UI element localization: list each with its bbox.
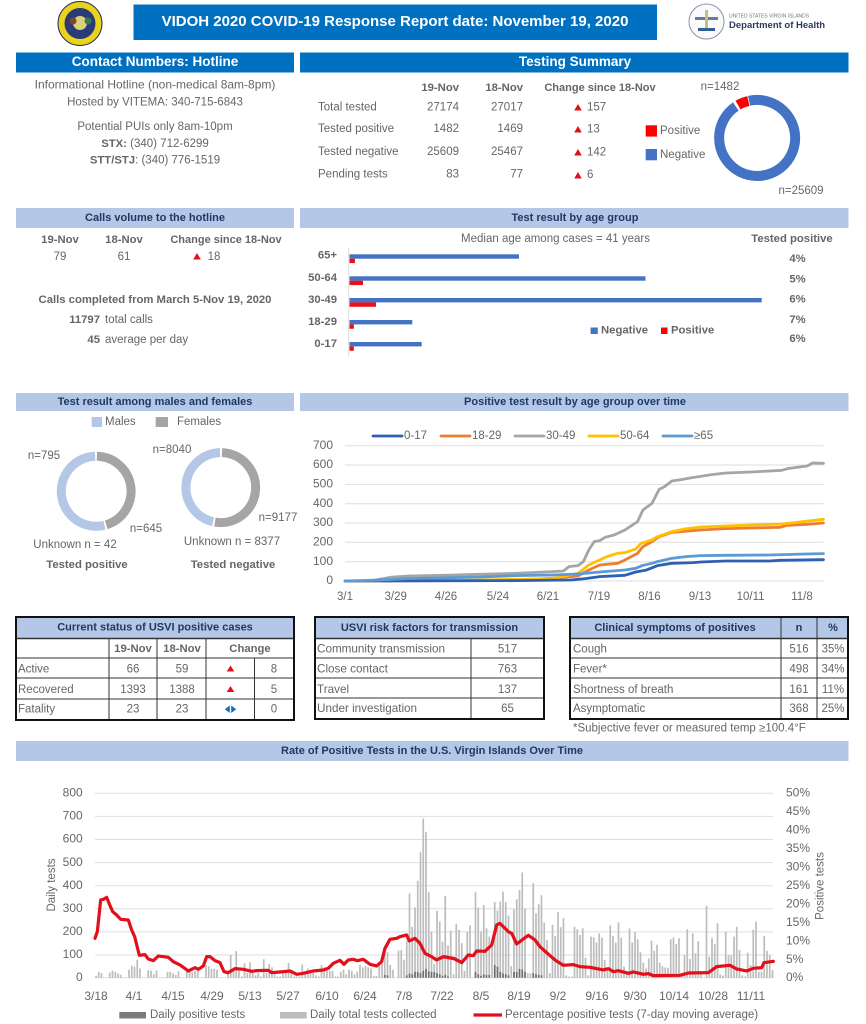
bar chart: tests by age group: 50-64: [308, 272, 338, 284]
text block: calls completed: Calls completed from March 5-Nov 19, 2020: [39, 294, 271, 306]
table: testing counts: 25609: [427, 146, 459, 158]
column: tested positive percentages: 6%: [789, 333, 806, 345]
heading: positive by age over time: [300, 393, 848, 411]
combo chart: daily tests and percent positive: 6/10: [315, 989, 339, 1003]
text block: hotline details: Informational Hotline (non-medical 8am-8pm): [35, 78, 275, 92]
column: tested positive percentages: 5%: [789, 273, 806, 285]
combo chart: daily tests and percent positive: 400: [63, 878, 83, 892]
donut chart: total positive vs negative: n=25609: [778, 185, 824, 197]
table: risk factors for transmission: 137: [498, 684, 517, 696]
line chart: cumulative positive by age: 3/1: [337, 591, 353, 603]
bar chart: tests by age group: 65+: [318, 249, 337, 261]
icon: Department of Health logo: UNITED STATES VIRGIN ISLANDS: [729, 13, 810, 19]
combo chart: daily tests and percent positive: 4/1: [126, 989, 143, 1003]
line chart: cumulative positive by age: 6/21: [537, 591, 559, 603]
table: clinical symptoms: Asymptomatic: [573, 703, 645, 715]
line chart: cumulative positive by age: 3/29: [385, 591, 407, 603]
table: current status of positive cases: 0: [271, 704, 277, 716]
legend: positive and negative: Negative: [660, 149, 705, 161]
combo chart: daily tests and percent positive: 10/28: [698, 989, 728, 1003]
table: clinical symptoms: 368: [789, 703, 809, 715]
heading: contact numbers: [16, 52, 294, 72]
table: clinical symptoms: 516: [789, 644, 809, 656]
legend: positive and negative: Positive: [660, 125, 700, 137]
table: clinical symptoms: n: [796, 622, 803, 634]
legend: age groups: 30-49: [546, 430, 575, 442]
icon: Department of Health logo: Department of Health: [729, 20, 825, 31]
combo chart: daily tests and percent positive: 10/14: [659, 989, 689, 1003]
legend: age groups: ≥65: [694, 430, 713, 442]
combo chart: daily tests and percent positive: Positive tests: [815, 852, 827, 920]
table: testing counts: 18-Nov: [485, 82, 524, 94]
donut chart: tested positive by sex: Unknown n = 42: [33, 539, 117, 551]
table: current status of positive cases: 18-Nov: [163, 643, 202, 655]
table: testing counts: 19-Nov: [421, 82, 460, 94]
table: risk factors for transmission: Under investigation: [317, 702, 417, 715]
table: risk factors for transmission: 517: [498, 644, 517, 656]
table: daily calls: 79: [54, 251, 66, 263]
combo chart: daily tests and percent positive: 4/15: [161, 989, 185, 1003]
combo chart: daily tests and percent positive: [46, 785, 827, 1003]
table: testing counts: [318, 82, 657, 181]
table: daily calls: Change since 18-Nov: [170, 234, 283, 246]
combo chart: daily tests and percent positive: 11/11: [737, 989, 765, 1003]
combo chart: daily tests and percent positive: 0%: [786, 970, 804, 984]
donut chart: tested negative by sex: Tested negative: [191, 559, 275, 571]
table: clinical symptoms: Fever*: [573, 664, 607, 676]
panel: test result by age group: [300, 208, 848, 357]
table: current status of positive cases: Active: [18, 664, 49, 676]
panel: calls volume: [16, 208, 294, 346]
combo chart: daily tests and percent positive: 40%: [786, 823, 810, 837]
legend: daily tests and moving average: Daily total tests collected: [310, 1009, 437, 1021]
panel: contact numbers hotline: [16, 52, 294, 167]
table: current status of positive cases: Fatality: [18, 704, 55, 716]
donut chart: tested negative by sex: n=8040: [153, 444, 191, 456]
table: testing counts: 142: [587, 147, 606, 159]
table: current status of positive cases: 1393: [120, 684, 146, 696]
text block: hotline details: STX: (340) 712-6299: [101, 138, 209, 150]
combo chart: daily tests and percent positive: 50%: [786, 785, 810, 799]
table: testing counts: Change since 18-Nov: [544, 82, 657, 94]
combo chart: daily tests and percent positive: 9/2: [550, 989, 567, 1003]
table: risk factors for transmission: Community transmission: [317, 643, 445, 656]
donut chart: tested negative by sex: [153, 444, 297, 571]
table: clinical symptoms: 34%: [821, 664, 845, 676]
text block: hotline details: STT/STJ: (340) 776-1519: [90, 154, 220, 167]
heading: rate of positive tests: [16, 741, 848, 761]
legend: age groups: 0-17: [404, 430, 427, 442]
icon: VIDOH seal: [58, 2, 102, 46]
line chart: cumulative positive by age: 100: [313, 554, 333, 568]
panel: positive by age over time: [300, 393, 848, 603]
table: testing counts: Total tested: [318, 102, 377, 114]
table: current status of positive cases: 19-Nov: [114, 643, 153, 655]
column: tested positive percentages: [751, 233, 833, 345]
table: risk factors for transmission: USVI risk factors for transmission: [341, 622, 518, 634]
combo chart: daily tests and percent positive: 9/16: [585, 989, 609, 1003]
heading: test result by age group: Test result by age group: [512, 212, 639, 224]
line chart: cumulative positive by age: 8/16: [638, 591, 661, 603]
heading: testing summary: [300, 52, 848, 72]
donut chart: tested positive by sex: n=645: [130, 523, 162, 535]
table: testing counts: 1469: [497, 123, 523, 135]
combo chart: daily tests and percent positive: Daily tests: [46, 858, 58, 912]
legend: age groups: 50-64: [620, 430, 650, 442]
donut chart: tested positive by sex: Tested positive: [46, 559, 128, 571]
title banner: [134, 4, 657, 40]
table: risk factors for transmission: [315, 617, 544, 719]
combo chart: daily tests and percent positive: 5/13: [238, 989, 262, 1003]
table: clinical symptoms: 498: [789, 664, 809, 676]
table: testing counts: 25467: [491, 146, 523, 158]
legend: males and females: Females: [177, 416, 221, 428]
heading: calls volume: Calls volume to the hotline: [85, 212, 225, 224]
legend: negative and positive: [591, 324, 714, 336]
text block: calls completed: 45: [87, 334, 100, 346]
table: testing counts: 13: [587, 124, 600, 136]
combo chart: daily tests and percent positive: 5%: [786, 952, 804, 966]
combo chart: daily tests and percent positive: 8/19: [507, 989, 531, 1003]
table: testing counts: 27174: [427, 102, 460, 114]
bar chart: tests by age group: 18-29: [308, 316, 337, 328]
text block: hotline details: Hosted by VITEMA: 340-715-6843: [67, 97, 243, 109]
combo chart: daily tests and percent positive: 3/18: [84, 989, 108, 1003]
table: current status of positive cases: Recovered: [18, 684, 74, 696]
text block: calls completed: 11797: [69, 314, 100, 326]
donut chart: tested negative by sex: n=9177: [259, 512, 297, 524]
table: current status of positive cases: Change: [229, 643, 271, 655]
table: daily calls: 18-Nov: [105, 234, 144, 246]
line chart: cumulative positive by age: 0: [326, 573, 333, 587]
table: clinical symptoms: 161: [789, 684, 809, 696]
table: testing counts: Tested negative: [318, 146, 399, 158]
text: median age: Median age among cases = 41 years: [461, 233, 650, 245]
table: clinical symptoms: Shortness of breath: [573, 684, 673, 696]
combo chart: daily tests and percent positive: 10%: [786, 934, 810, 948]
combo chart: daily tests and percent positive: 7/8: [396, 989, 413, 1003]
panel: testing summary: [300, 52, 848, 197]
heading: testing summary: Testing Summary: [519, 54, 632, 69]
combo chart: daily tests and percent positive: 0: [76, 970, 83, 984]
combo chart: daily tests and percent positive: 30%: [786, 860, 810, 874]
legend: negative and positive: Negative: [601, 324, 648, 336]
heading: test result by age group: [300, 208, 848, 228]
line chart: cumulative positive by age: 11/8: [791, 591, 813, 603]
heading: rate of positive tests: Rate of Positive Tests in the U.S. Virgin Islands Over Time: [281, 745, 583, 757]
donut chart: tested negative by sex: Unknown n = 8377: [184, 536, 280, 548]
line chart: cumulative positive by age: 4/26: [435, 591, 457, 603]
line chart: cumulative positive by age: 300: [313, 515, 333, 529]
table: clinical symptoms: %: [828, 622, 838, 634]
table: risk factors for transmission: Close contact: [317, 663, 389, 676]
table: current status of positive cases: 5: [271, 684, 277, 696]
legend: positive and negative: [646, 125, 705, 161]
combo chart: daily tests and percent positive: 5/27: [276, 989, 300, 1003]
combo chart: daily tests and percent positive: 200: [63, 924, 83, 938]
text block: calls completed: total calls: [105, 314, 153, 326]
combo chart: daily tests and percent positive: 300: [63, 901, 83, 915]
heading: positive by age over time: Positive test result by age group over time: [464, 396, 686, 408]
table: daily calls: 19-Nov: [41, 234, 80, 246]
panel: males and females: [16, 393, 297, 571]
heading: males and females: [16, 393, 294, 411]
legend: males and females: Males: [105, 416, 136, 428]
table: clinical symptoms: 11%: [822, 684, 844, 696]
donut chart: tested positive by sex: n=795: [28, 450, 60, 462]
table: current status of positive cases: Current status of USVI positive cases: [57, 621, 253, 633]
combo chart: daily tests and percent positive: 35%: [786, 841, 810, 855]
combo chart: daily tests and percent positive: 6/24: [353, 989, 377, 1003]
text block: calls completed: average per day: [105, 334, 188, 346]
combo chart: daily tests and percent positive: 600: [63, 832, 83, 846]
donut chart: tested positive by sex: [28, 450, 162, 571]
table: risk factors for transmission: Travel: [317, 683, 349, 696]
table: testing counts: 77: [510, 169, 523, 181]
bar chart: tests by age group: 30-49: [308, 294, 337, 306]
heading: calls volume: [16, 208, 294, 228]
legend: daily tests and moving average: Percentage positive tests (7-day moving average): [505, 1009, 758, 1021]
table: current status of positive cases: 66: [127, 664, 139, 676]
table: risk factors for transmission: 65: [501, 703, 514, 715]
table: clinical symptoms: 25%: [821, 703, 845, 715]
line chart: cumulative positive by age: 7/19: [588, 591, 610, 603]
table: testing counts: Pending tests: [318, 169, 388, 181]
heading: males and females: Test result among males and females: [58, 396, 252, 408]
line chart: cumulative positive by age: 500: [313, 477, 333, 491]
line chart: cumulative positive by age: 600: [313, 457, 333, 471]
table: current status of positive cases: 1388: [169, 684, 195, 696]
text block: hotline details: Potential PUIs only 8am-10pm: [77, 121, 233, 133]
text block: hotline details: [35, 78, 275, 167]
combo chart: daily tests and percent positive: 20%: [786, 897, 810, 911]
combo chart: daily tests and percent positive: 8/5: [473, 989, 490, 1003]
combo chart: daily tests and percent positive: 7/22: [430, 989, 454, 1003]
combo chart: daily tests and percent positive: 700: [63, 809, 83, 823]
table: testing counts: 157: [587, 102, 606, 114]
table: current status of positive cases: 23: [127, 704, 139, 716]
panel: rate of positive tests over time: [16, 741, 848, 1021]
legend: males and females: [92, 416, 221, 428]
line chart: cumulative positive by age: [313, 438, 824, 603]
icon: Department of Health logo: [689, 4, 825, 39]
table: testing counts: 27017: [491, 102, 523, 114]
table: current status of positive cases: 8: [271, 664, 277, 676]
line chart: cumulative positive by age: 10/11: [737, 591, 765, 603]
combo chart: daily tests and percent positive: 4/29: [200, 989, 224, 1003]
legend: age groups: [373, 430, 713, 442]
table: clinical symptoms: Clinical symptoms of positives: [594, 622, 756, 634]
combo chart: daily tests and percent positive: 45%: [786, 804, 810, 818]
table: current status of positive cases: 59: [176, 664, 188, 676]
column: tested positive percentages: Tested positive: [751, 233, 833, 245]
legend: age groups: 18-29: [472, 430, 501, 442]
combo chart: daily tests and percent positive: 100: [63, 947, 83, 961]
table: clinical symptoms: [570, 617, 848, 719]
donut chart: total positive vs negative: [701, 81, 824, 197]
legend: daily tests and moving average: Daily positive tests: [150, 1009, 245, 1021]
combo chart: daily tests and percent positive: 800: [63, 785, 83, 799]
line chart: cumulative positive by age: 200: [313, 534, 333, 548]
table: testing counts: 6: [587, 169, 593, 181]
column: tested positive percentages: 7%: [789, 314, 806, 326]
table: risk factors for transmission: 763: [498, 664, 517, 676]
table: current status of positive cases: 23: [176, 704, 188, 716]
line chart: cumulative positive by age: 5/24: [487, 591, 510, 603]
table: daily calls: 18: [208, 251, 220, 263]
line chart: cumulative positive by age: 400: [313, 496, 333, 510]
table: clinical symptoms: Cough: [573, 644, 607, 656]
table: testing counts: 1482: [433, 123, 459, 135]
column: tested positive percentages: 4%: [789, 253, 806, 265]
bar chart: tests by age group: [308, 248, 762, 357]
title banner: VIDOH 2020 COVID-19 Response Report date: November 19, 2020: [162, 13, 628, 30]
donut chart: total positive vs negative: n=1482: [701, 81, 739, 93]
heading: contact numbers: Contact Numbers: Hotline: [72, 54, 239, 69]
combo chart: daily tests and percent positive: 9/30: [623, 989, 647, 1003]
legend: negative and positive: Positive: [671, 324, 714, 336]
table: clinical symptoms: 35%: [821, 644, 845, 656]
bar chart: tests by age group: 0-17: [314, 338, 337, 350]
column: tested positive percentages: 6%: [789, 293, 806, 305]
table: daily calls: 61: [118, 251, 130, 263]
combo chart: daily tests and percent positive: 25%: [786, 878, 810, 892]
combo chart: daily tests and percent positive: 15%: [786, 915, 810, 929]
line chart: cumulative positive by age: 700: [313, 438, 333, 452]
table: daily calls: [41, 234, 283, 263]
table: testing counts: 83: [446, 169, 459, 181]
combo chart: daily tests and percent positive: 500: [63, 855, 83, 869]
text block: calls completed: [39, 294, 271, 346]
line chart: cumulative positive by age: 9/13: [689, 591, 711, 603]
footnote: fever definition: *Subjective fever or measured temp ≥100.4°F: [573, 723, 806, 735]
table: current status of positive cases: [16, 617, 294, 720]
table: testing counts: Tested positive: [318, 123, 394, 135]
legend: daily tests and moving average: [119, 1009, 758, 1021]
